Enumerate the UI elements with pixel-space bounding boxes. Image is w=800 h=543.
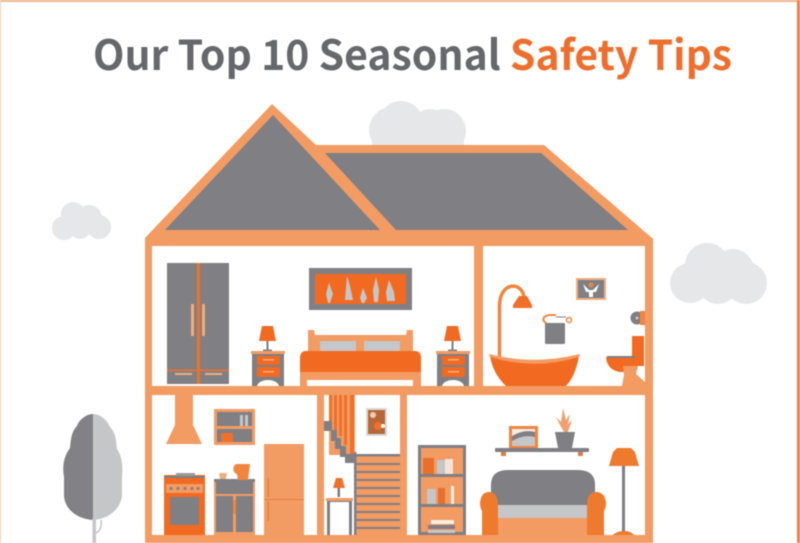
bookshelf xyxy=(418,445,466,535)
sofa xyxy=(480,470,606,535)
toilet xyxy=(606,336,645,386)
house xyxy=(145,104,653,543)
banister xyxy=(324,395,355,540)
nightstand: left xyxy=(251,351,285,386)
kitchen xyxy=(164,395,304,535)
roof xyxy=(145,104,652,246)
house walls xyxy=(145,238,653,543)
stair picture xyxy=(366,408,387,436)
wall painting xyxy=(309,268,412,310)
table lamp: left xyxy=(259,326,276,351)
potted plant xyxy=(555,408,575,448)
living room xyxy=(418,408,639,535)
bedroom xyxy=(167,263,470,386)
bathroom xyxy=(490,278,645,386)
stove xyxy=(164,473,205,535)
upper stairs xyxy=(324,421,355,463)
cup xyxy=(219,473,227,479)
cloud: right xyxy=(670,243,767,304)
kitchen counter xyxy=(214,479,255,535)
range hood xyxy=(166,395,202,444)
wall shelf xyxy=(495,448,589,456)
bathroom picture xyxy=(576,278,606,300)
wall cabinet xyxy=(214,409,255,445)
table lamp: right xyxy=(444,326,461,351)
hall table xyxy=(326,498,353,535)
pitcher xyxy=(233,464,250,480)
title: Our Top 10 Seasonal Safety Tips xyxy=(93,22,732,82)
staircase xyxy=(324,395,400,540)
nightstand: right xyxy=(436,351,470,386)
fridge xyxy=(264,444,304,535)
hall lamp xyxy=(333,478,345,497)
floor lamp xyxy=(609,448,639,535)
towel and rail xyxy=(543,315,572,344)
lower stairs xyxy=(354,452,400,535)
bed xyxy=(300,330,421,386)
wardrobe xyxy=(167,263,229,384)
toilet paper xyxy=(630,311,645,325)
tree xyxy=(63,414,122,543)
framed picture xyxy=(509,426,538,448)
cloud: left xyxy=(52,202,111,240)
shower xyxy=(500,286,532,358)
bathtub xyxy=(490,355,579,386)
cloud: top behind roof xyxy=(369,101,466,153)
